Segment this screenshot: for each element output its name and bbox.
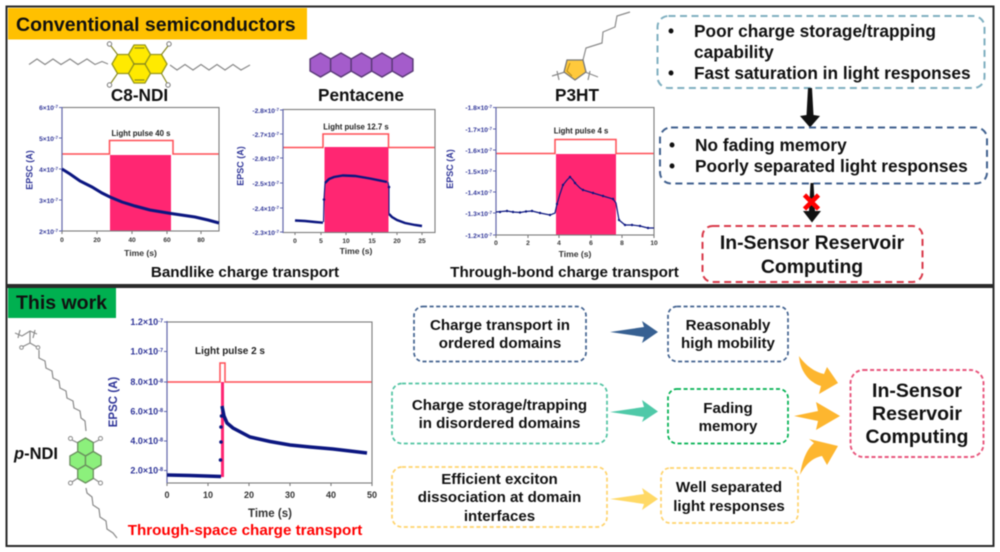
chart: P3HT EPSC: -1.4×10 [465,190,488,197]
chart: p-NDI EPSC: 10 [203,490,213,500]
box: efficient exciton dissociation: interfaces [464,508,535,525]
chart: p-NDI EPSC: -8 [158,467,163,473]
chart: pentacene EPSC: -2.7×10 [252,132,275,139]
chart: P3HT EPSC: -1.7×10 [465,127,488,134]
heading: conventional semiconductors [8,8,307,40]
box: reasonably high mobility [668,306,788,362]
heading: this work [8,288,116,318]
arrow: orange middle [794,402,840,430]
chart: pentacene EPSC: 10 [342,238,350,245]
box: charge transport in ordered domains: Charge transport in [430,317,570,334]
chart: pentacene EPSC: -2.5×10 [252,181,275,188]
chart: C8-NDI EPSC: 0 [60,237,64,244]
caption: through-space charge transport: Through-space charge transport [128,522,362,539]
box: in-sensor reservoir computing: Reservoir [872,403,962,425]
chart: pentacene EPSC: 5 [319,238,323,245]
chart: C8-NDI EPSC: EPSC (A) [24,150,34,190]
chart: pentacene EPSC: -7 [275,155,279,160]
arrow: teal [610,400,658,422]
chart: pentacene EPSC: -7 [275,107,279,112]
chart: C8-NDI EPSC: 80 [197,237,205,244]
chart: C8-NDI EPSC: 5×10 [39,136,54,143]
chart: p-NDI EPSC: 30 [285,490,295,500]
arrow: curved orange bottom [800,439,838,475]
box: efficient exciton dissociation [392,467,607,527]
chart: C8-NDI EPSC: 4×10 [39,167,54,174]
chart: P3HT EPSC: -7 [488,147,492,152]
box: charge transport in ordered domains: ordered domains [439,335,561,352]
panel: conventional semiconductors [6,6,994,285]
chart: pentacene EPSC: Time (s) [340,246,373,256]
chart: C8-NDI EPSC: 2×10 [39,229,54,236]
callout: poor charge storage: Poor charge storage/trapping [694,21,936,41]
chart: p-NDI EPSC: EPSC (A) [108,377,120,427]
callout: poor charge storage [658,16,984,88]
chart: P3HT EPSC: -1.3×10 [465,211,488,218]
arrow: blocked with red cross [803,183,821,222]
heading: this work: This work [16,292,107,314]
chart: C8-NDI EPSC: 20 [93,237,101,244]
chart: p-NDI EPSC: 20 [244,490,254,500]
chart: pentacene EPSC: -2.4×10 [252,206,275,213]
callout: in-sensor reservoir computing (blocked) [702,226,922,282]
callout: in-sensor reservoir computing (blocked): In-Sensor Reservoir [720,232,905,254]
box: efficient exciton dissociation: dissociation at domain [418,489,581,506]
chart: pentacene EPSC: 25 [418,238,426,245]
box: charge storage in disordered domains: in disordered domains [419,415,580,432]
chart: pentacene EPSC: -2.8×10 [252,108,275,115]
chart: P3HT EPSC: 8 [620,240,624,247]
callout: no fading memory: Poorly separated light responses [695,156,968,176]
chart: P3HT EPSC: 6 [589,240,593,247]
chart: pentacene EPSC: -7 [275,131,279,136]
chart: P3HT EPSC: -1.6×10 [465,148,488,155]
chart: p-NDI EPSC: -7 [158,348,163,354]
chart: C8-NDI EPSC: -7 [54,166,58,171]
caption: bandlike charge transport: Bandlike charge transport [151,264,339,281]
callout: poor charge storage: capability [694,42,774,62]
chart: p-NDI EPSC: 1.0×10 [130,346,158,356]
chart: P3HT EPSC: -7 [488,104,492,109]
chart: P3HT EPSC: -7 [488,126,492,131]
box: in-sensor reservoir computing: Computing [866,426,968,448]
box: fading memory: Fading [703,400,753,417]
chart: C8-NDI EPSC: -7 [54,228,58,233]
callout: no fading memory: • [669,156,675,176]
molecule: p-NDI [15,330,117,538]
chart: P3HT EPSC: 10 [650,240,658,247]
callout: no fading memory: • [669,135,675,155]
chart: C8-NDI EPSC: 40 [128,237,136,244]
arrow: blue [610,321,658,343]
chart: pentacene EPSC: -7 [275,229,279,234]
callout: poor charge storage: • [668,21,674,41]
molecule: C8-NDI [29,42,250,87]
chart: p-NDI EPSC: Light pulse 2 s [195,346,265,357]
chart: P3HT EPSC: 2 [526,240,530,247]
box: fading memory [668,389,788,444]
chart: C8-NDI EPSC [24,104,219,258]
chart: C8-NDI EPSC: Light pulse 40 s [112,129,171,138]
chart: C8-NDI EPSC: -7 [54,104,58,109]
box: reasonably high mobility: high mobility [681,335,776,352]
chart: pentacene EPSC: 20 [393,238,401,245]
callout: in-sensor reservoir computing (blocked): Computing [761,256,863,278]
chart: p-NDI EPSC: -8 [158,438,163,444]
chart: P3HT EPSC: -7 [488,232,492,237]
chart: C8-NDI EPSC: 60 [163,237,171,244]
chart: p-NDI EPSC: 40 [326,490,336,500]
caption: through-bond charge transport: Through-bond charge transport [450,264,679,281]
chart: p-NDI EPSC: 2.0×10 [130,466,158,476]
chart: P3HT EPSC: Time (s) [559,249,592,259]
box: well separated light responses: Well separated [676,479,782,496]
callout: no fading memory [660,128,987,184]
chart: p-NDI EPSC: -8 [158,378,163,384]
chart: P3HT EPSC: -1.5×10 [465,169,488,176]
chart: p-NDI EPSC: Time (s) [248,508,292,520]
box: reasonably high mobility: Reasonably [686,317,771,334]
chart: P3HT EPSC: Light pulse 4 s [554,126,609,136]
box: in-sensor reservoir computing: In-Sensor [872,380,962,402]
label: pentacene: Pentacene [318,85,404,105]
molecule: pentacene [310,53,413,77]
chart: p-NDI EPSC: 8.0×10 [130,377,158,387]
chart: C8-NDI EPSC: 6×10 [39,105,54,112]
chart: pentacene EPSC: -7 [275,205,279,210]
chart: pentacene EPSC: EPSC (A) [236,146,246,186]
chart: P3HT EPSC: -1.2×10 [465,233,488,240]
chart: p-NDI EPSC: 1.2×10 [130,317,158,327]
callout: poor charge storage: • [668,63,674,83]
chart: pentacene EPSC: 0 [293,238,297,245]
chart: pentacene EPSC: 15 [368,238,376,245]
chart: P3HT EPSC: EPSC (A) [445,149,455,189]
box: efficient exciton dissociation: Efficient exciton [441,471,558,488]
chart: P3HT EPSC: -7 [488,189,492,194]
chart: P3HT EPSC [445,104,658,259]
box: well separated light responses: light responses [673,498,785,515]
chart: P3HT EPSC: 0 [494,240,498,247]
box: fading memory: memory [699,418,758,435]
callout: no fading memory: No fading memory [695,135,847,155]
chart: C8-NDI EPSC: -7 [54,135,58,140]
chart: pentacene EPSC: Light pulse 12.7 s [323,122,389,132]
heading: conventional semiconductors: Conventional semiconductors [16,14,296,36]
chart: C8-NDI EPSC: Time (s) [124,248,157,258]
box: charge storage in disordered domains: Charge storage/trapping [412,397,587,414]
chart: pentacene EPSC [236,107,435,256]
label: P3HT: P3HT [555,85,599,105]
chart: C8-NDI EPSC: -7 [54,197,58,202]
chart: P3HT EPSC: 4 [557,240,561,247]
chart: pentacene EPSC: -7 [275,180,279,185]
chart: p-NDI EPSC: 50 [367,490,377,500]
label: p-NDI: p-NDI [13,445,58,463]
chart: p-NDI EPSC: 0 [164,490,170,500]
chart: p-NDI EPSC: -7 [158,318,163,324]
chart: pentacene EPSC: -2.3×10 [252,230,275,237]
panel: this work [6,287,994,546]
chart: pentacene EPSC: -2.6×10 [252,156,275,163]
box: charge storage in disordered domains [392,384,607,444]
arrow: curved orange top [799,356,838,394]
arrow: down to fading memory [800,88,820,128]
chart: p-NDI EPSC: -8 [158,408,163,414]
arrow: yellow [610,488,658,510]
chart: C8-NDI EPSC: 3×10 [39,198,54,205]
chart: p-NDI EPSC: 6.0×10 [130,406,158,416]
chart: p-NDI EPSC: 4.0×10 [130,436,158,446]
molecule: P3HT [552,12,630,80]
chart: P3HT EPSC: -1.8×10 [465,105,488,112]
chart: P3HT EPSC: -7 [488,210,492,215]
box: charge transport in ordered domains [414,306,586,362]
box: well separated light responses [661,468,798,523]
chart: p-NDI EPSC [108,317,377,520]
box: in-sensor reservoir computing [850,370,984,457]
callout: poor charge storage: Fast saturation in light responses [694,63,971,83]
chart: P3HT EPSC: -7 [488,168,492,173]
label: C8-NDI: C8-NDI [111,85,168,105]
